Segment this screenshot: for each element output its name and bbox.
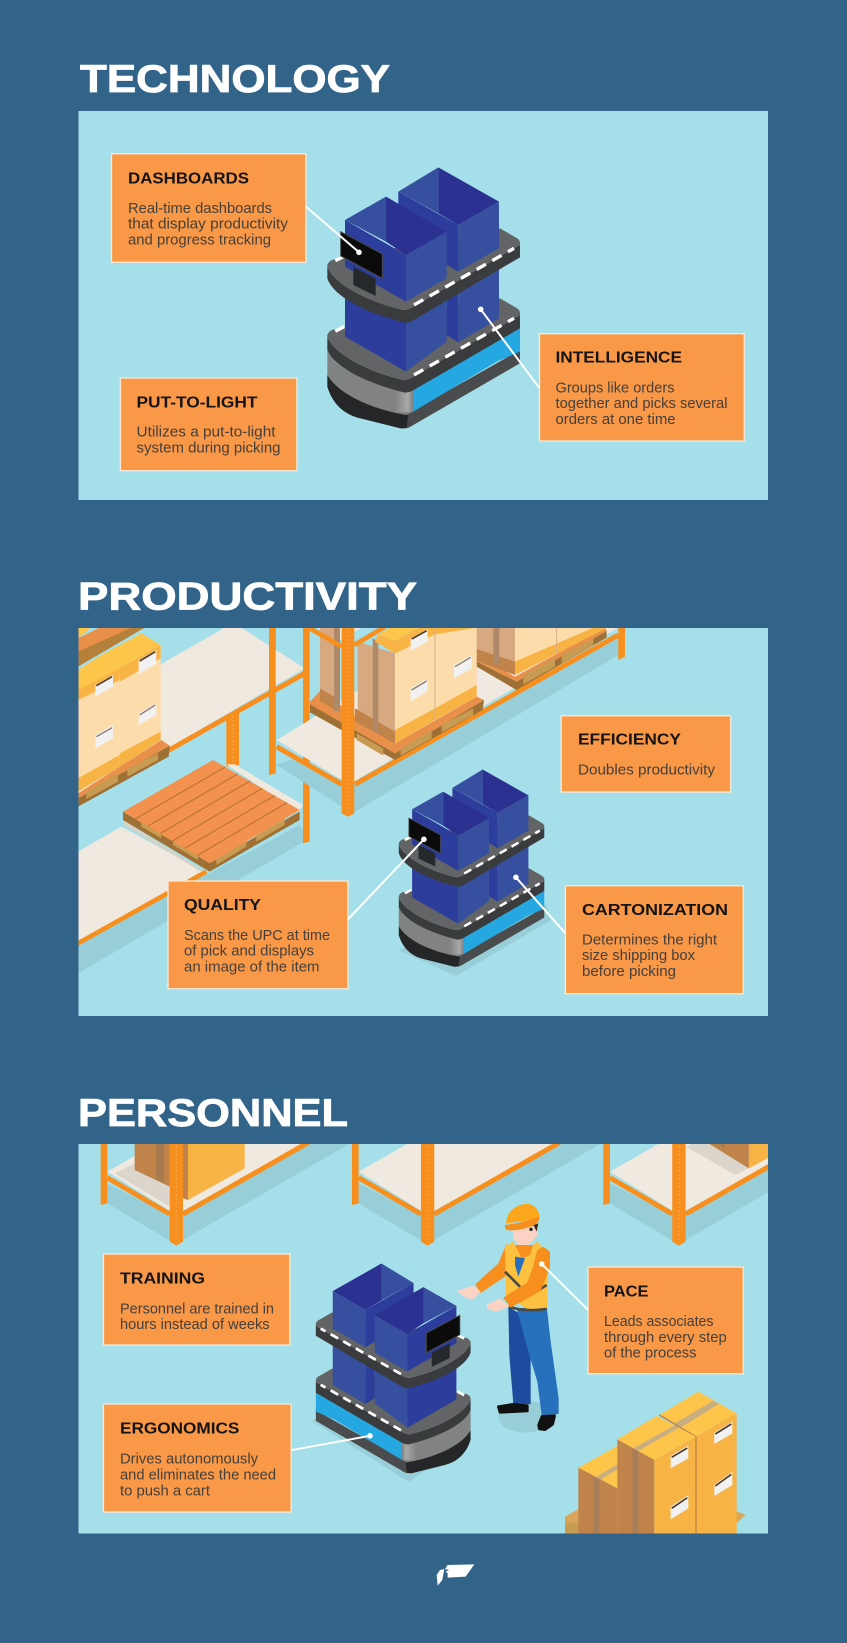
rack right xyxy=(603,1144,768,1246)
logo xyxy=(437,1564,474,1586)
callout: intelligence: together and picks several xyxy=(556,396,728,412)
callout: put-to-light xyxy=(120,378,297,471)
panel: personnel xyxy=(78,1144,768,1534)
robot illustration xyxy=(327,167,520,429)
robot illustration xyxy=(398,769,551,976)
callout: pace: PACE xyxy=(604,1284,649,1300)
callout: intelligence: orders at one time xyxy=(556,412,676,428)
title: personnel: PERSONNEL xyxy=(78,1092,348,1135)
callout: put-to-light: PUT-TO-LIGHT xyxy=(136,395,258,412)
title: productivity: PRODUCTIVITY xyxy=(78,575,417,618)
callout: dashboards xyxy=(112,154,306,262)
callout: intelligence xyxy=(540,334,744,441)
callout: efficiency: Doubles productivity xyxy=(578,762,716,778)
leader line: ergonomics xyxy=(291,1433,373,1450)
worker figure xyxy=(457,1204,559,1433)
callout: ergonomics: and eliminates the need xyxy=(120,1468,276,1484)
robot illustration xyxy=(312,1264,471,1482)
callout: quality: an image of the item xyxy=(184,960,320,976)
warehouse shelving scene xyxy=(78,622,625,973)
callout: pace xyxy=(588,1267,743,1374)
callout: ergonomics: ERGONOMICS xyxy=(120,1421,240,1438)
callout: dashboards: that display productivity xyxy=(128,217,289,233)
callout: quality: of pick and displays xyxy=(184,944,314,960)
callout: intelligence: INTELLIGENCE xyxy=(556,350,682,367)
callout: training xyxy=(103,1254,290,1345)
callout: quality xyxy=(168,881,348,989)
callout: ergonomics: to push a cart xyxy=(120,1483,210,1499)
rack left xyxy=(101,1143,351,1246)
leader line: pace xyxy=(539,1261,588,1310)
callout: dashboards: DASHBOARDS xyxy=(128,170,249,187)
callout: cartonization: before picking xyxy=(582,964,676,980)
callout: quality: Scans the UPC at time xyxy=(184,928,330,944)
leader line: dashboards xyxy=(306,207,362,255)
stacked boxes on pallet xyxy=(565,1392,746,1537)
callout: ergonomics xyxy=(103,1404,291,1512)
leader line: cartonization xyxy=(513,874,565,933)
callout: cartonization: CARTONIZATION xyxy=(582,902,728,919)
leader line: quality xyxy=(348,836,427,919)
wooden pallet xyxy=(123,760,303,872)
rack centre xyxy=(352,1143,603,1246)
callout: cartonization: Determines the right xyxy=(582,932,717,948)
callout: put-to-light: Utilizes a put-to-light xyxy=(136,425,276,441)
left shelving with boxes xyxy=(78,622,310,973)
callout: pace: of the process xyxy=(604,1346,696,1362)
callout: training: TRAINING xyxy=(120,1271,205,1288)
callout: efficiency: EFFICIENCY xyxy=(578,732,681,749)
callout: training: hours instead of weeks xyxy=(120,1317,270,1333)
callout: quality: QUALITY xyxy=(184,897,261,914)
callout: cartonization xyxy=(565,886,743,994)
panel: productivity xyxy=(78,622,768,1016)
callout: efficiency xyxy=(561,716,731,792)
callout: dashboards: and progress tracking xyxy=(128,233,271,249)
callout: pace: Leads associates xyxy=(604,1314,714,1330)
panel: technology xyxy=(78,111,768,500)
callout: intelligence: Groups like orders xyxy=(556,380,674,396)
callout: cartonization: size shipping box xyxy=(582,948,696,964)
callout: training: Personnel are trained in xyxy=(120,1301,274,1317)
callout: pace: through every step xyxy=(604,1330,727,1346)
callout: put-to-light: system during picking xyxy=(136,441,280,457)
warehouse racks and stacked boxes xyxy=(100,1144,768,1534)
right shelving with boxes xyxy=(269,623,625,817)
callout: dashboards: Real-time dashboards xyxy=(128,201,272,217)
leader line: intelligence xyxy=(478,306,539,388)
callout: ergonomics: Drives autonomously xyxy=(120,1452,259,1468)
title: technology: TECHNOLOGY xyxy=(80,58,390,101)
